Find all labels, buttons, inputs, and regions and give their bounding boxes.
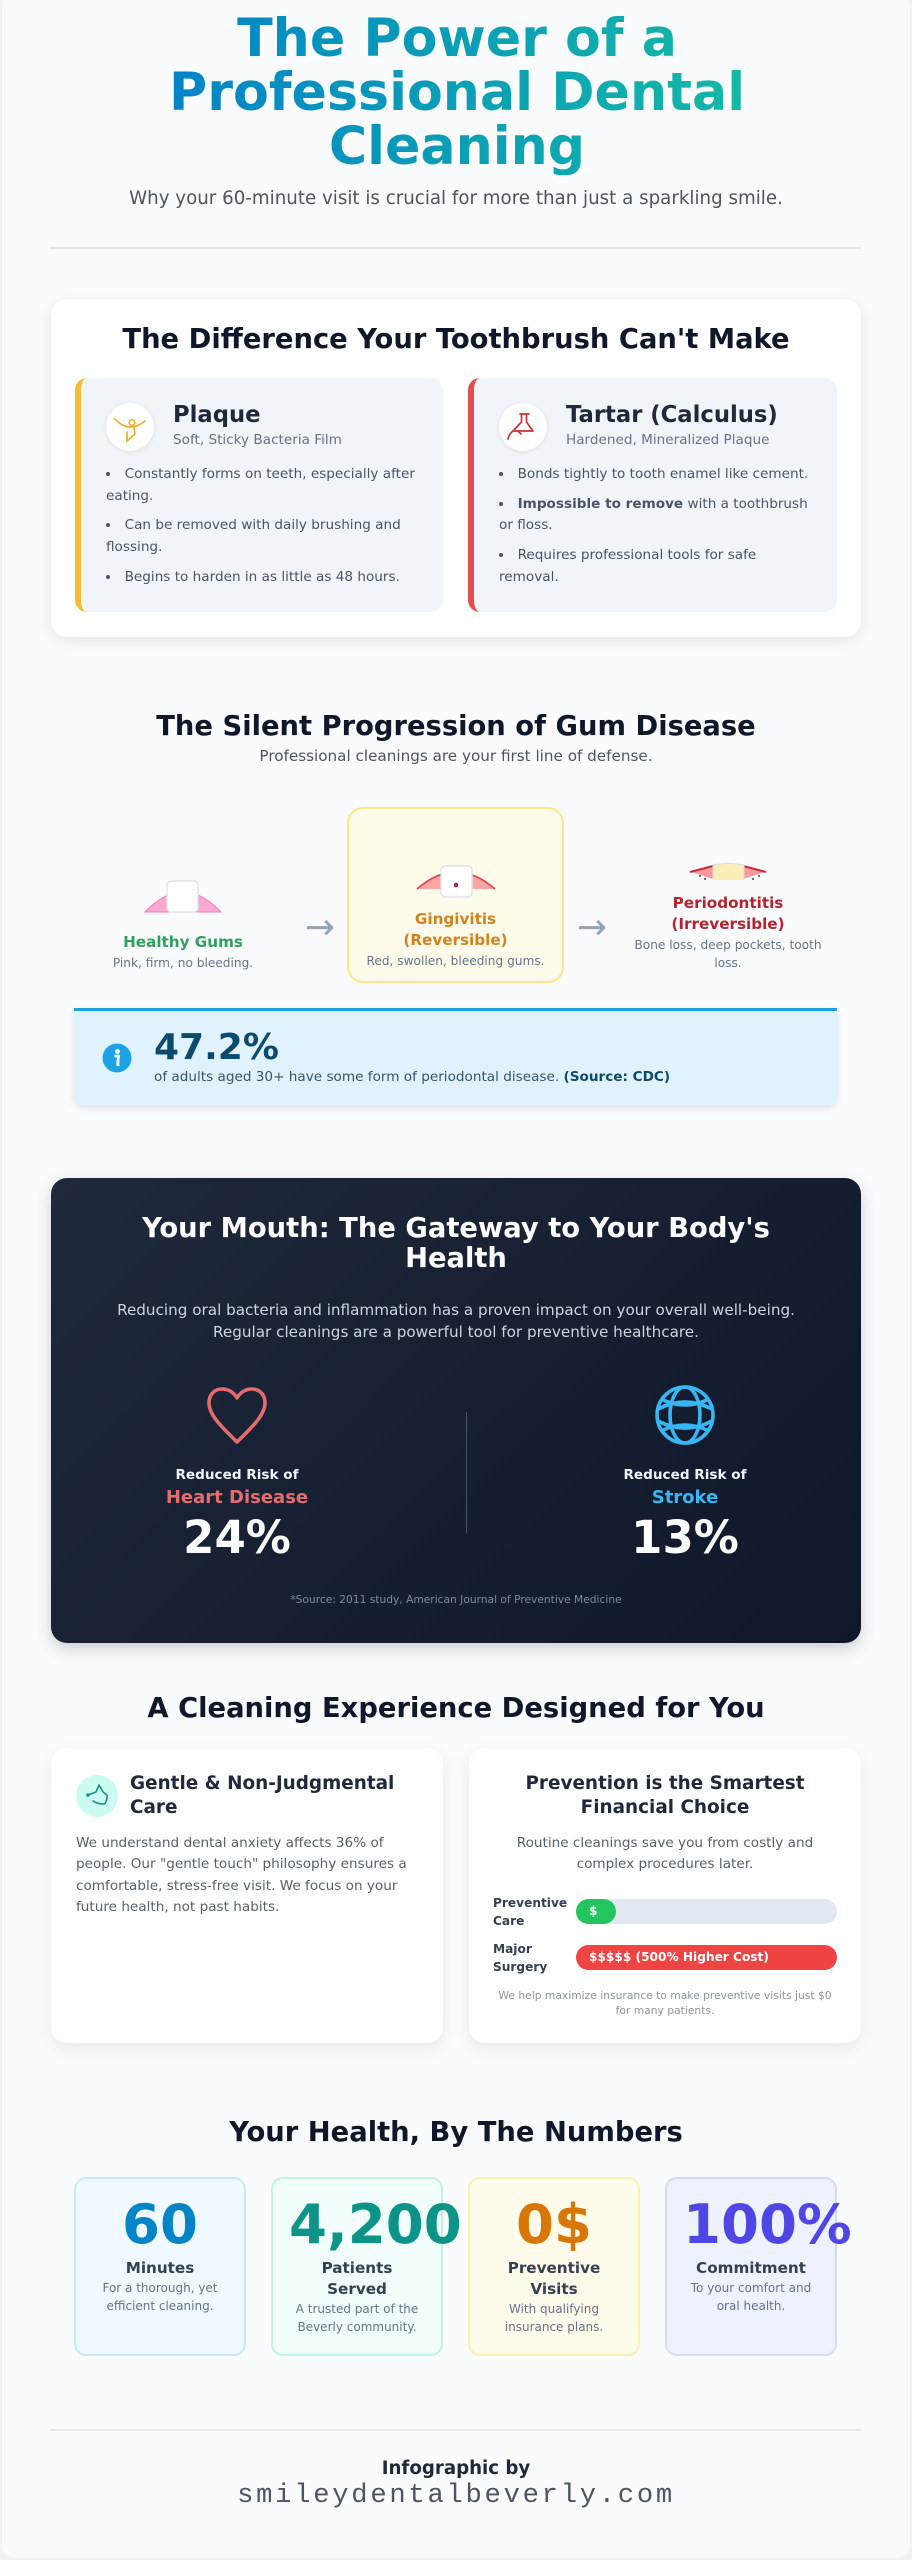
plaque subtitle: Soft, Sticky Bacteria Film: [173, 432, 342, 448]
bar label preventive: Care: [493, 1914, 524, 1928]
plaque list: [106, 466, 415, 585]
tartar subtitle: Hardened, Mineralized Plaque: [566, 432, 769, 448]
value: 24%: [183, 1511, 291, 1564]
footer label: Infographic by: [382, 2458, 530, 2479]
card title: Gentle & Non-Judgmental: [130, 1773, 394, 1794]
card text: comfortable, stress-free visit. We focus on your: [76, 1878, 397, 1894]
text periodontitis: [634, 938, 822, 970]
intro text: Reducing oral bacteria and inflammation has a proven impact on your overall well-being.: [117, 1301, 795, 1319]
card title: Financial Choice: [581, 1797, 749, 1818]
bar label surgery: Major: [493, 1942, 532, 1956]
intro text: Regular cleanings are a powerful tool for preventive healthcare.: [213, 1323, 699, 1341]
stat card: patients: [271, 2177, 443, 2356]
condition: Stroke: [652, 1487, 718, 1508]
source: *Source: 2011 study, American Journal of Preventive Medicine: [290, 1592, 622, 1606]
label: [508, 2259, 600, 2298]
arrow: →: [305, 906, 335, 948]
panel: tartar: [468, 378, 837, 612]
condition: Heart Disease: [166, 1487, 308, 1508]
label: Commitment: [696, 2259, 806, 2277]
footer website: smileydentalbeverly.com: [237, 2480, 675, 2511]
label: Visits: [530, 2280, 578, 2298]
value: 60: [122, 2192, 198, 2256]
arrow: →: [577, 906, 607, 948]
tartar list: Requires professional tools for safe removal.: [499, 547, 756, 585]
card text: [517, 1835, 813, 1872]
heading: gum disease: The Silent Progression of Gum Disease: [156, 710, 756, 742]
heading: body health: Your Mouth: The Gateway to Your Body's: [142, 1213, 770, 1244]
value: 4,200: [289, 2192, 462, 2256]
label gingivitis: Gingivitis: [415, 910, 496, 928]
label periodontitis: (Irreversible): [671, 915, 785, 933]
icon: info: [102, 1044, 132, 1072]
description: For a thorough, yet efficient cleaning.: [102, 2281, 218, 2313]
callout: statistic: [74, 1008, 837, 1105]
plaque list: Constantly forms on teeth, especially after eating.: [106, 466, 415, 504]
card title: Care: [130, 1797, 177, 1818]
stat: stroke: [623, 1466, 747, 1564]
label: Served: [327, 2280, 387, 2298]
icon: periodontitis: [690, 863, 766, 880]
card text: [76, 1835, 407, 1915]
description: A trusted part of the Beverly community.: [296, 2302, 418, 2334]
bar fill preventive: $: [589, 1904, 597, 1918]
statistic text: of adults aged 30+ have some form of periodontal disease. (Source: CDC): [154, 1069, 670, 1085]
label: Minutes: [126, 2259, 194, 2277]
bar fill preventive: [576, 1899, 616, 1924]
tartar list: [499, 466, 808, 585]
heading: experience: A Cleaning Experience Designed for You: [147, 1692, 765, 1724]
card text: We understand dental anxiety affects 36% of: [76, 1835, 384, 1851]
text periodontitis: loss.: [714, 956, 742, 970]
heading: body health: Health: [405, 1243, 507, 1274]
text gingivitis: Red, swollen, bleeding gums.: [366, 954, 545, 968]
icon: globe: [655, 1385, 715, 1445]
stage: periodontitis: [634, 894, 822, 970]
statistic value: 47.2%: [154, 1026, 279, 1068]
subtitle: Why your 60-minute visit is crucial for more than just a sparkling smile.: [129, 188, 783, 209]
stat card: minutes: [74, 2177, 246, 2356]
heading: body health: [142, 1213, 770, 1274]
bar: surgery: $$$$$ (500% Higher Cost): [589, 1950, 769, 1964]
bar: preventive: [576, 1899, 837, 1924]
icon: gingivitis: [416, 865, 496, 898]
insurance note: [498, 1988, 832, 2016]
title: The Power of a: [237, 9, 677, 69]
bar label surgery: [493, 1942, 547, 1974]
title: Cleaning: [329, 117, 585, 177]
panel: body health: [51, 1178, 861, 1643]
intro text: [117, 1301, 795, 1341]
text periodontitis: Bone loss, deep pockets, tooth: [634, 938, 822, 952]
insurance note: for many patients.: [616, 2004, 714, 2016]
label: [322, 2259, 392, 2298]
icon: thumbs up: [76, 1775, 118, 1817]
card text: Routine cleanings save you from costly and: [517, 1835, 813, 1851]
description: To your comfort and oral health.: [691, 2281, 811, 2313]
card text: people. Our "gentle touch" philosophy ensures a: [76, 1856, 407, 1872]
tartar list: Bonds tightly to tooth enamel like cement.: [518, 466, 808, 482]
panel: plaque: [75, 378, 443, 612]
card text: future health, not past habits.: [76, 1899, 279, 1915]
icon: healthy gums: [144, 880, 222, 913]
stat: heart disease: [166, 1466, 308, 1564]
text healthy: Pink, firm, no bleeding.: [113, 956, 253, 970]
bar label surgery: Surgery: [493, 1960, 547, 1974]
heading: numbers: Your Health, By The Numbers: [229, 2116, 683, 2148]
value: 0$: [516, 2192, 592, 2256]
label periodontitis: [671, 894, 785, 933]
icon: heart: [207, 1387, 267, 1444]
plaque title: Plaque: [173, 402, 260, 428]
stage: healthy gums: [113, 933, 253, 970]
icon: plaque: [106, 403, 154, 451]
panel: gentle care: [51, 1748, 443, 2043]
plaque list: Can be removed with daily brushing and flossing.: [106, 517, 401, 555]
card title: [130, 1773, 394, 1818]
bar: surgery: [576, 1945, 837, 1970]
value: 13%: [631, 1511, 739, 1564]
insurance note: We help maximize insurance to make preventive visits just $0: [498, 1988, 832, 2002]
heading: toothbrush difference: The Difference Your Toothbrush Can't Make: [122, 324, 790, 354]
label: Reduced Risk of: [175, 1466, 299, 1482]
panel: financial choice: [469, 1748, 861, 2043]
plaque list: Begins to harden in as little as 48 hours.: [125, 569, 400, 585]
title: Professional Dental: [169, 63, 745, 123]
label: Preventive: [508, 2259, 600, 2277]
title: [169, 12, 745, 175]
footer: [237, 2458, 675, 2511]
label: Reduced Risk of: [623, 1466, 747, 1482]
icon: tartar: [499, 403, 547, 451]
tartar list: Impossible to remove with a toothbrush or floss.: [499, 496, 808, 533]
value: 100%: [683, 2192, 852, 2256]
bar label preventive: [493, 1896, 567, 1928]
bar label preventive: Preventive: [493, 1896, 567, 1910]
label gingivitis: [403, 910, 508, 949]
description: With qualifying insurance plans.: [505, 2302, 603, 2334]
stage: gingivitis: [347, 807, 564, 983]
stat card: commitment: [665, 2177, 837, 2356]
card title: Prevention is the Smartest: [525, 1773, 805, 1794]
label healthy: Healthy Gums: [123, 933, 243, 951]
card title: [525, 1773, 805, 1818]
stat card: preventive visits: [468, 2177, 640, 2356]
label: Patients: [322, 2259, 392, 2277]
panel: toothbrush difference: [51, 299, 861, 637]
tartar title: Tartar (Calculus): [566, 402, 778, 428]
gum disease subheading: Professional cleanings are your first line of defense.: [259, 747, 653, 765]
card text: complex procedures later.: [577, 1856, 753, 1872]
label periodontitis: Periodontitis: [673, 894, 783, 912]
label gingivitis: (Reversible): [403, 931, 508, 949]
